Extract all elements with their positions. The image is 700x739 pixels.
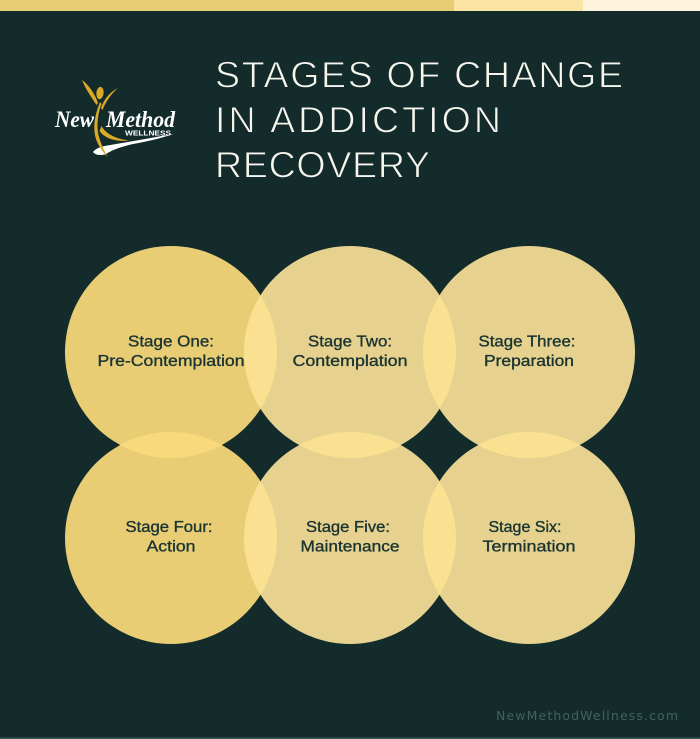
logo wordmark second word: Method [105,107,175,132]
logo wordmark: New [54,107,95,132]
title: STAGES OF CHANGE [215,54,623,96]
label: stage two: Stage Two: [308,334,392,350]
label: stage four: Action [146,538,196,556]
label: stage six: Termination [482,538,576,556]
title: RECOVERY [215,144,430,186]
circle: stage six [423,432,635,644]
label: stage one: Pre-Contemplation [98,353,244,370]
circle: stage five [244,432,456,644]
overlaps: horizontal lenses [244,295,456,595]
top colour bar [0,0,700,11]
logo swoosh [93,134,174,155]
circle: stage three [423,246,635,458]
label: stage four: Stage Four: [126,519,212,536]
label: stage three: Preparation [484,353,574,370]
circle: stage two [244,246,456,458]
icon: gold figure [82,80,129,157]
logo subtitle: WELLNESS [125,130,171,138]
overlaps: vertical lenses [120,432,580,458]
label: stage five: Maintenance [300,538,400,556]
footer website: NewMethodWellness.com [496,708,678,723]
label: stage one: Stage One: [128,334,214,350]
label: stage five: Stage Five: [306,519,390,536]
circle diagram [65,246,635,644]
stage labels [98,334,576,556]
title [215,54,623,186]
title: IN ADDICTION [215,98,501,140]
circle: stage four [65,432,277,644]
label: stage six: Stage Six: [488,519,562,536]
logo: New Method Wellness [54,80,175,157]
label: stage three: Stage Three: [478,334,576,350]
label: stage two: Contemplation [292,353,408,370]
circle: stage one [65,246,277,458]
